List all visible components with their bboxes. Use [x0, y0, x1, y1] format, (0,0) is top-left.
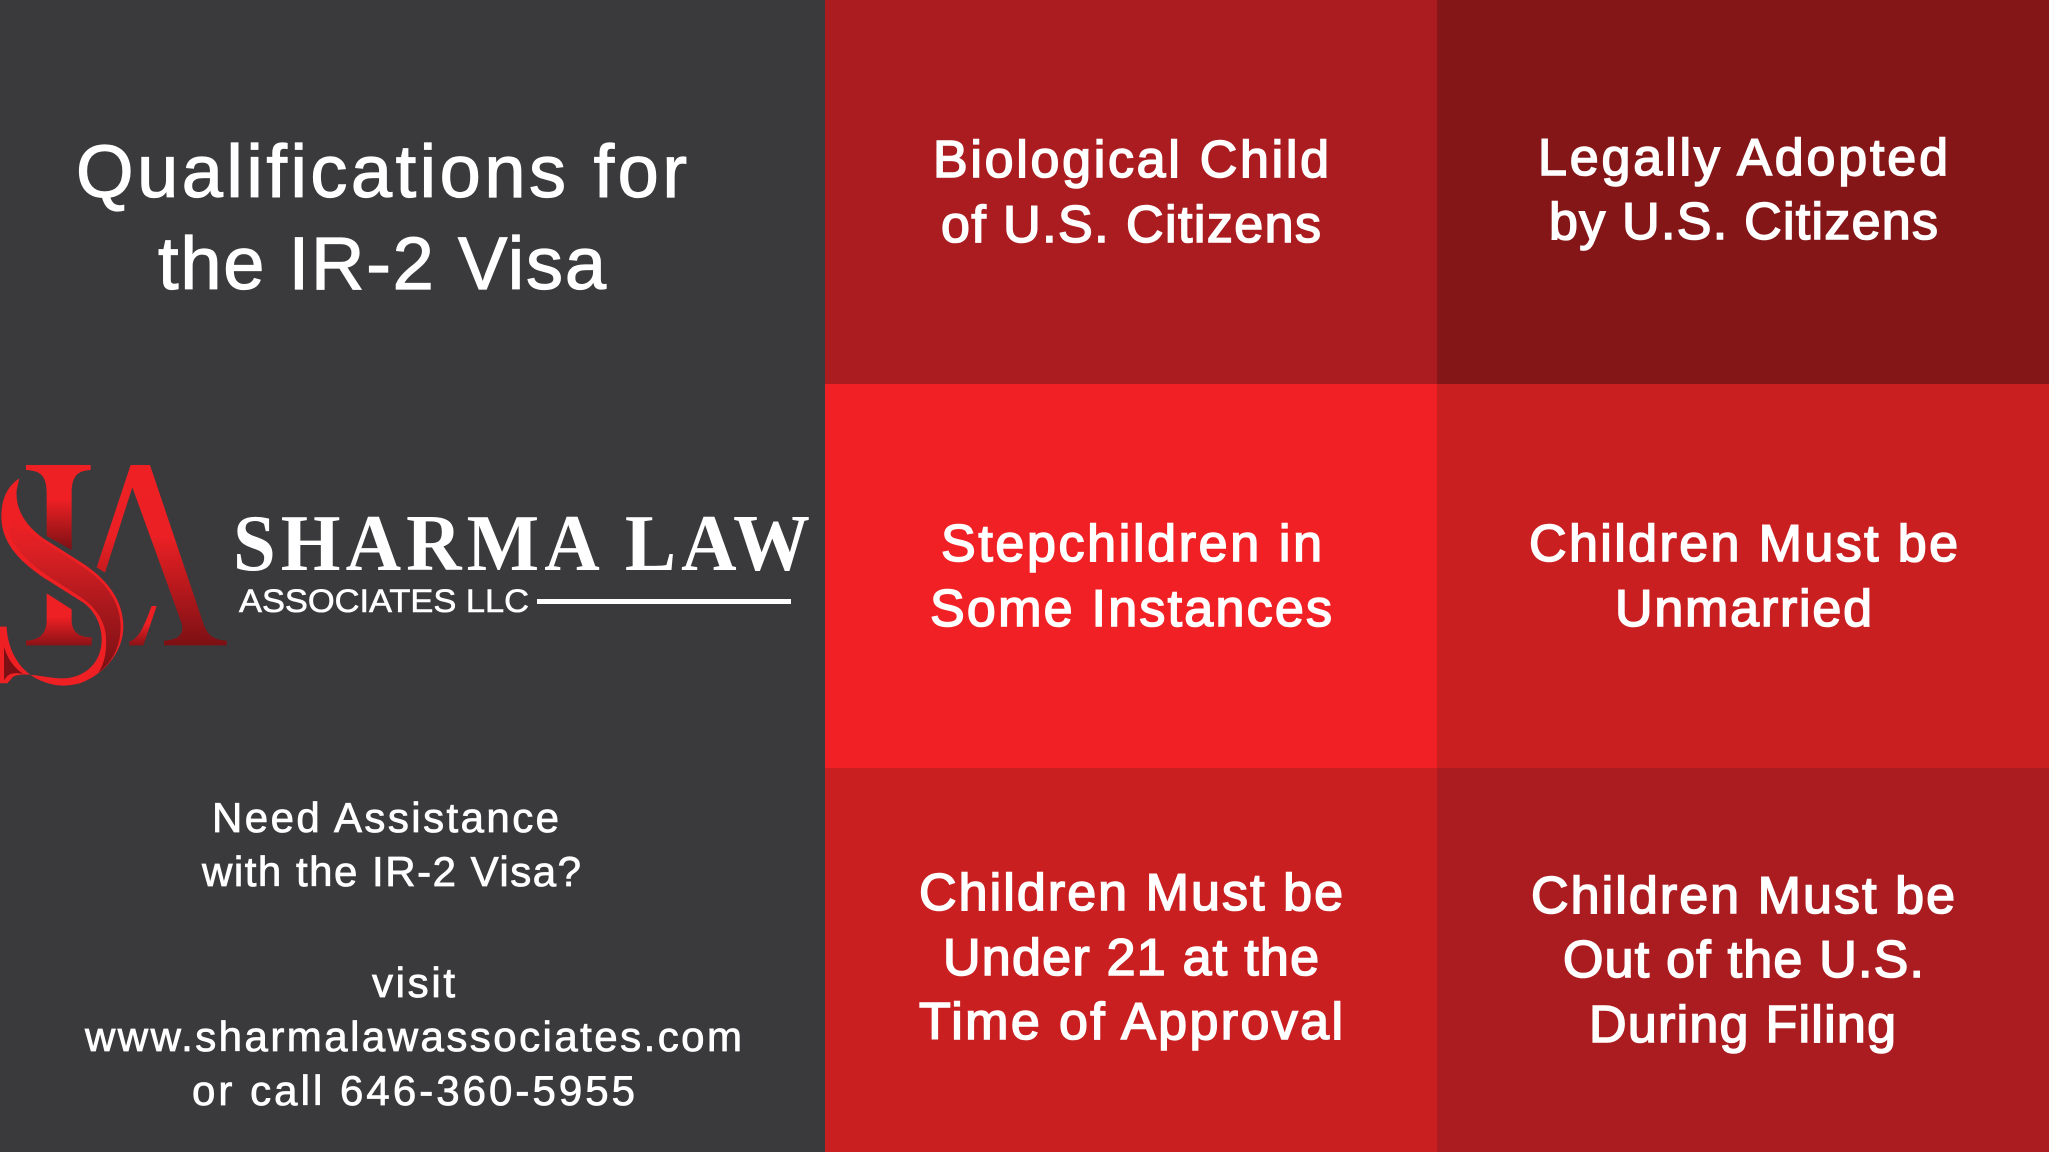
panel: under 21: Under 21 at the	[943, 929, 1319, 987]
panel: unmarried	[1437, 384, 2049, 768]
icon: SA monogram	[0, 465, 227, 686]
panel: legally adopted	[1437, 0, 2049, 384]
panel: left dark column	[0, 0, 825, 1152]
panel: under 21: Children Must be	[919, 864, 1343, 922]
panel: stepchildren: Some Instances	[930, 580, 1332, 638]
text block: contact call to action: visit	[372, 959, 455, 1006]
panel: stepchildren: Stepchildren in	[941, 515, 1322, 573]
panel: out of the U.S.: During Filing	[1589, 996, 1896, 1054]
title	[76, 130, 687, 305]
panel: legally adopted: by U.S. Citizens	[1549, 193, 1938, 251]
text block: contact call to action: www.sharmalawassociates.com	[84, 1013, 742, 1060]
panel: biological child: of U.S. Citizens	[941, 196, 1321, 254]
title: the IR-2 Visa	[158, 222, 607, 305]
panel: biological child	[825, 0, 1437, 384]
panel: under 21	[825, 768, 1437, 1152]
panel: under 21: Time of Approval	[919, 993, 1343, 1051]
panel: unmarried: Unmarried	[1615, 580, 1872, 638]
panel: out of the U.S.	[1437, 768, 2049, 1152]
logo wordmark: ASSOCIATES LLC	[239, 583, 529, 619]
logo wordmark: SHARMA LAW	[233, 499, 810, 587]
text block: contact call to action: or call 646-360-5955	[192, 1067, 635, 1114]
logo: Sharma Law Associates LLC	[0, 465, 810, 686]
panel: stepchildren	[825, 384, 1437, 768]
panel: out of the U.S.: Children Must be	[1531, 867, 1955, 925]
text block: contact call to action	[84, 794, 742, 1114]
title: Qualifications for	[76, 130, 687, 213]
panel: out of the U.S.: Out of the U.S.	[1563, 931, 1924, 989]
panel: legally adopted: Legally Adopted	[1538, 129, 1948, 187]
panel: unmarried: Children Must be	[1529, 515, 1958, 573]
text block: contact call to action: with the IR-2 Visa?	[201, 848, 581, 895]
panel: biological child: Biological Child	[933, 131, 1329, 189]
text block: contact call to action: Need Assistance	[212, 794, 559, 841]
